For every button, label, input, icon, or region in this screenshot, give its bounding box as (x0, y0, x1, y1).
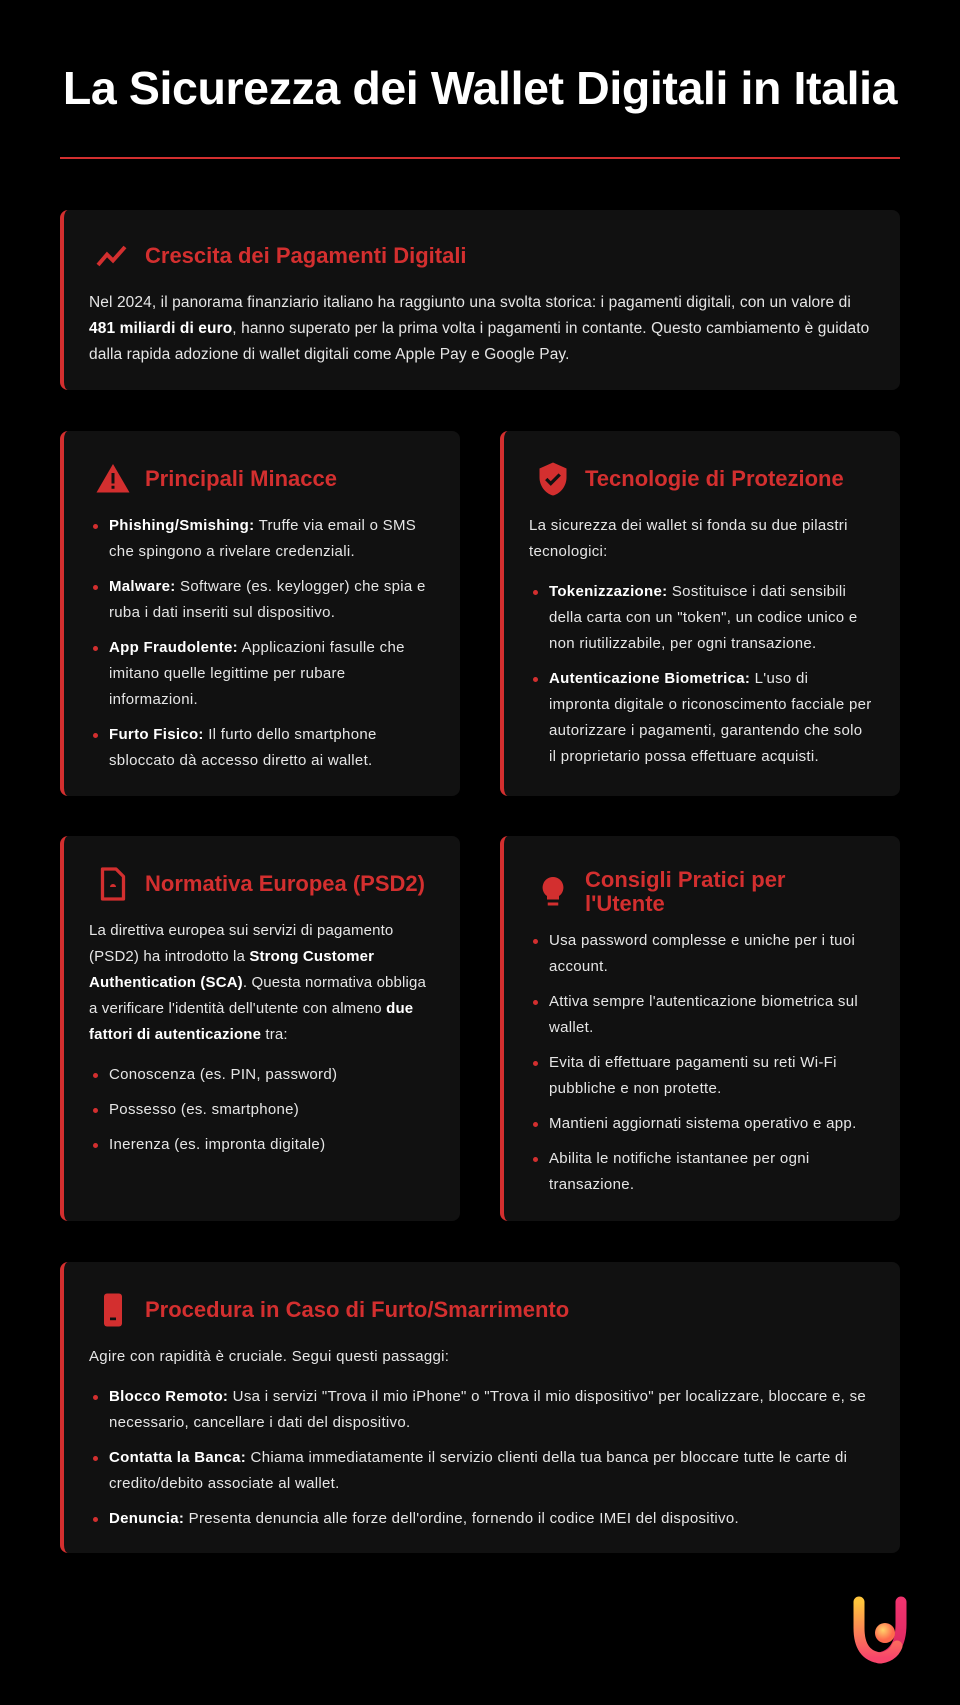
list: fattori: Possesso (es. smartphone) (109, 1101, 299, 1118)
heading: procedura (104, 1294, 569, 1326)
text: procedura intro: Agire con rapidità è cruciale. Segui questi passaggi: (89, 1348, 449, 1365)
list: procedura: Denuncia: Presenta denuncia alle forze dell'ordine, fornendo il codice IMEI del dispositivo. (109, 1510, 739, 1527)
list: tecnologie (533, 583, 872, 765)
panel: tecnologie (500, 431, 900, 796)
heading: tecnologie (540, 462, 844, 496)
panel: normativa (60, 836, 460, 1221)
panel: consigli (500, 836, 900, 1221)
list: procedura: Contatta la Banca: Chiama immediatamente il servizio clienti della tua banca per bloccare tutte le carte di credito/debito associate al wallet. (109, 1449, 847, 1492)
list: tecnologie: Tokenizzazione: Sostituisce i dati sensibili della carta con un "token", un codice unico e non riutilizzabile, per ogni transazione. (549, 583, 858, 652)
title: La Sicurezza dei Wallet Digitali in Italia (63, 62, 897, 114)
list: consigli: Evita di effettuare pagamenti su reti Wi-Fi pubbliche e non protette. (549, 1054, 837, 1097)
list: minacce: Phishing/Smishing: Truffe via email o SMS che spingono a rivelare credenziali. (109, 517, 416, 560)
list: procedura (93, 1388, 866, 1527)
heading: normativa (100, 867, 425, 901)
list: fattori: Conoscenza (es. PIN, password) (109, 1066, 337, 1083)
heading: procedura: Procedura in Caso di Furto/Smarrimento (145, 1297, 569, 1322)
list: consigli (533, 932, 858, 1193)
list: consigli: Usa password complesse e uniche per i tuoi account. (549, 932, 855, 975)
heading: consigli: Consigli Pratici per l'Utente (585, 867, 786, 916)
heading: crescita: Crescita dei Pagamenti Digitali (145, 243, 467, 268)
list: minacce: Malware: Software (es. keylogger) che spia e ruba i dati inseriti sul dispositivo. (109, 578, 426, 621)
list: consigli: Abilita le notifiche istantanee per ogni transazione. (549, 1150, 810, 1193)
list: fattori: Inerenza (es. impronta digitale) (109, 1136, 325, 1153)
list: minacce: Furto Fisico: Il furto dello smartphone sbloccato dà accesso diretto ai wallet. (109, 726, 377, 769)
panel: procedura (60, 1262, 900, 1553)
text: crescita: Nel 2024, il panorama finanziario italiano ha raggiunto una svolta storica: i pagamenti digitali, con un valore di 481 miliardi di euro, hanno superato per la prima volta i pagamenti in contante. Questo cambiamento è guidato dalla rapida adozione di wallet digitali come Apple Pay e Google Pay. (89, 294, 869, 363)
panel: minacce (60, 431, 460, 796)
text: normativa: La direttiva europea sui servizi di pagamento (PSD2) ha introdotto la Strong Customer Authentication (SCA). Questa normativa obbliga a verificare l'identità dell'utente con almeno due fattori di autenticazione tra: (89, 922, 426, 1043)
list: tecnologie: Autenticazione Biometrica: L'uso di impronta digitale o riconoscimento facciale per autorizzare i pagamenti, garantendo che solo il proprietario possa effettuare acquisti. (549, 670, 872, 765)
list: consigli: Attiva sempre l'autenticazione biometrica sul wallet. (549, 993, 858, 1036)
list: minacce (93, 517, 426, 769)
logo (854, 1596, 906, 1664)
heading: tecnologie: Tecnologie di Protezione (585, 466, 844, 491)
text: tecnologie intro: La sicurezza dei wallet si fonda su due pilastri tecnologici: (529, 517, 848, 560)
list: consigli: Mantieni aggiornati sistema operativo e app. (549, 1115, 857, 1132)
list: procedura: Blocco Remoto: Usa i servizi "Trova il mio iPhone" o "Trova il mio dispositivo" per localizzare, bloccare e, se necessario, cancellare i dati del dispositivo. (109, 1388, 866, 1431)
heading: minacce: Principali Minacce (145, 466, 337, 491)
list: fattori (93, 1066, 337, 1153)
list: minacce: App Fraudolente: Applicazioni fasulle che imitano quelle legittime per rubare informazioni. (109, 639, 405, 708)
panel: crescita (60, 210, 900, 390)
heading: normativa: Normativa Europea (PSD2) (145, 871, 425, 896)
